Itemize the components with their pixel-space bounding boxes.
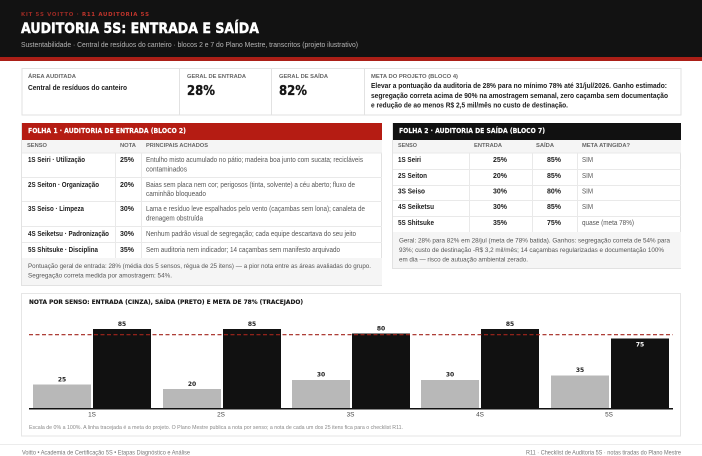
bars 5S: 35 bbox=[576, 367, 584, 374]
bars 1S: 85 bbox=[118, 321, 126, 328]
row 5S: 5S Shitsuke bbox=[398, 218, 434, 227]
note: folha 1 bbox=[28, 263, 371, 280]
kicker: KIT 5S VOITTO · R11 AUDITORIA 5S bbox=[21, 12, 149, 18]
row 2S: 2S Seiton · Organização bbox=[28, 180, 100, 189]
heading: folha 1: FOLHA 1 · AUDITORIA DE ENTRADA (BLOCO 2) bbox=[28, 127, 186, 135]
row 4S: 4S Seiketsu bbox=[398, 202, 434, 211]
row 1S bbox=[28, 155, 363, 174]
card: area auditada: Central de resíduos do canteiro bbox=[28, 83, 128, 92]
chart caption: Escala de 0% a 100%. A linha tracejada é a meta do projeto. O Plano Mestre publica a nota por senso; a nota de cada um dos 25 itens fica para o checklist R11. bbox=[29, 425, 403, 431]
row 5S: Sem auditoria nem indicador; 14 caçambas sem manifesto arquivado bbox=[146, 247, 340, 254]
row 5S: 35% bbox=[120, 245, 135, 254]
bars 1S bbox=[33, 321, 151, 418]
note: folha 2: Geral: 28% para 82% em 28/jul (meta de 78% batida). Ganhos: segregação correta de 54% para bbox=[399, 238, 670, 244]
row 5S: quase (meta 78%) bbox=[582, 220, 634, 227]
row 3S: 3S Seiso bbox=[398, 186, 426, 196]
row 1S: 25% bbox=[493, 155, 508, 164]
row 2S: 2S Seiton bbox=[398, 171, 427, 180]
note: folha 1: Segregação correta medida por amostragem: 54%. bbox=[28, 272, 172, 280]
card: meta do projeto bbox=[371, 74, 669, 110]
bars 4S: 4S bbox=[476, 412, 484, 418]
bars 5S bbox=[551, 338, 669, 418]
subtitle: Sustentabilidade · Central de resíduos do canteiro · blocos 2 e 7 do Plano Mestre, transcritos (projeto ilustrativo) bbox=[21, 40, 358, 49]
heading: folha 2: FOLHA 2 · AUDITORIA DE SAÍDA (BLOCO 7) bbox=[399, 126, 545, 135]
row 2S: SIM bbox=[582, 173, 593, 180]
footer bbox=[0, 444, 702, 456]
card: meta do projeto: e redução de ao menos R$ 2,5 mil/mês no custo de destinação. bbox=[371, 100, 568, 110]
bars 2S: 2S bbox=[217, 412, 225, 418]
card: geral de entrada bbox=[187, 74, 246, 99]
row 2S: Baias sem placa nem cor; perigosos (tinta, solvente) a céu aberto; fluxo de bbox=[146, 182, 355, 189]
header band bbox=[0, 0, 702, 61]
note: folha 1: Pontuação geral de entrada: 28% (média dos 5 sensos, régua de 25 itens) — a pior nota entre as áreas avaliadas do grupo. bbox=[28, 263, 371, 270]
note: folha 2: 93%; custo de destinação -R$ 3,2 mil/mês; 14 caçambas regularizadas e documentação 100% bbox=[399, 247, 664, 254]
bars 3S: 30 bbox=[317, 372, 325, 378]
bars 3S: 80 bbox=[377, 326, 385, 332]
bars 5S: 75 bbox=[636, 342, 644, 348]
row 2S: caminhão bloqueado bbox=[146, 191, 206, 198]
row 4S: Nenhum padrão visual de segregação; cada equipe descartava do seu jeito bbox=[146, 231, 356, 238]
row 1S: 1S Seiri bbox=[398, 155, 421, 164]
row 4S: 85% bbox=[547, 202, 562, 211]
chart title: NOTA POR SENSO: ENTRADA (CINZA), SAÍDA (PRETO) E META DE 78% (TRACEJADO) bbox=[29, 298, 303, 306]
bars 5S: 5S bbox=[605, 412, 613, 418]
row 3S bbox=[398, 186, 593, 196]
row 1S: SIM bbox=[582, 157, 593, 164]
bars 4S: 85 bbox=[506, 321, 514, 328]
card: meta do projeto: Elevar a pontuação da auditoria de 28% para no mínimo 78% até 31/jul/2026. Ganho estimado: bbox=[371, 81, 667, 90]
row 1S: Entulho misto acumulado no pátio; madeira boa junto com sucata; recicláveis bbox=[146, 157, 363, 164]
card: area auditada bbox=[28, 73, 128, 92]
card: meta do projeto: segregação correta acima de 90% na amostragem semanal, zero caçamba sem documentação bbox=[371, 91, 669, 100]
panel: folha 2 bbox=[392, 123, 681, 268]
card: area auditada: ÁREA AUDITADA bbox=[28, 73, 76, 80]
summary cards bbox=[22, 68, 681, 115]
row 4S: 30% bbox=[493, 202, 508, 211]
card: meta do projeto: META DO PROJETO (BLOCO 4) bbox=[371, 74, 458, 80]
row 2S bbox=[398, 171, 593, 180]
axis baseline bbox=[29, 408, 673, 410]
row 4S: 4S Seiketsu · Padronização bbox=[28, 229, 110, 238]
row 1S: 25% bbox=[120, 155, 135, 164]
row 1S: 1S Seiri · Utilização bbox=[28, 155, 86, 164]
column headers: SAÍDA bbox=[536, 141, 554, 149]
bars 4S bbox=[421, 321, 539, 418]
column headers: META ATINGIDA? bbox=[582, 143, 631, 149]
row 3S: SIM bbox=[582, 188, 593, 196]
row 2S: 20% bbox=[120, 180, 135, 189]
row 2S: 85% bbox=[547, 171, 562, 180]
row 1S: contaminados bbox=[146, 166, 187, 174]
row 1S bbox=[398, 155, 593, 164]
column headers: NOTA bbox=[120, 143, 136, 149]
row 4S bbox=[28, 229, 356, 238]
row 4S: 30% bbox=[120, 229, 135, 238]
column headers: SENSO bbox=[398, 143, 418, 149]
column headers: ENTRADA bbox=[474, 143, 502, 149]
row 3S: 3S Seiso · Limpeza bbox=[28, 204, 85, 213]
row 2S bbox=[28, 180, 355, 198]
column headers bbox=[398, 141, 631, 149]
panel: folha 1 bbox=[22, 123, 382, 286]
target line 78% bbox=[29, 334, 673, 336]
panel: bar chart bbox=[22, 294, 680, 436]
row 3S: 30% bbox=[493, 186, 508, 196]
title: AUDITORIA 5S: ENTRADA E SAÍDA bbox=[21, 20, 259, 37]
row 5S bbox=[398, 218, 634, 227]
card: geral de entrada: 28% bbox=[187, 84, 215, 99]
note: folha 2 bbox=[399, 238, 670, 264]
note: folha 2: em dia — risco de autuação ambiental zerado. bbox=[399, 256, 528, 264]
bars 2S: 20 bbox=[188, 381, 196, 388]
row 3S bbox=[28, 204, 365, 222]
bars 1S: 25 bbox=[58, 376, 66, 384]
bars 1S: 1S bbox=[88, 412, 96, 418]
row 5S: 5S Shitsuke · Disciplina bbox=[28, 245, 99, 254]
card: geral de saida bbox=[279, 72, 328, 99]
row 3S: 80% bbox=[547, 186, 562, 196]
bars 2S: 85 bbox=[248, 321, 256, 328]
row 4S bbox=[398, 202, 593, 211]
card: geral de saida: GERAL DE SAÍDA bbox=[279, 72, 328, 80]
column headers bbox=[27, 143, 208, 149]
bars 3S bbox=[292, 326, 410, 418]
row 3S: 30% bbox=[120, 204, 135, 213]
bars 3S: 3S bbox=[347, 412, 354, 418]
card: geral de saida: 82% bbox=[279, 84, 307, 99]
row 5S bbox=[28, 245, 340, 254]
row 3S: Lama e resíduo leve espalhados pelo vento (caçambas sem lona); canaleta de bbox=[146, 206, 365, 213]
row 3S: drenagem obstruída bbox=[146, 216, 203, 222]
bars 4S: 30 bbox=[446, 372, 454, 378]
row 5S: 35% bbox=[493, 218, 508, 227]
row 1S: 85% bbox=[547, 155, 562, 164]
column headers: PRINCIPAIS ACHADOS bbox=[146, 143, 208, 149]
column headers: SENSO bbox=[27, 143, 48, 149]
row 2S: 20% bbox=[493, 171, 508, 180]
row 4S: SIM bbox=[582, 204, 593, 211]
bars 2S bbox=[163, 321, 281, 418]
row 5S: 75% bbox=[547, 218, 562, 227]
card: geral de entrada: GERAL DE ENTRADA bbox=[187, 74, 246, 80]
